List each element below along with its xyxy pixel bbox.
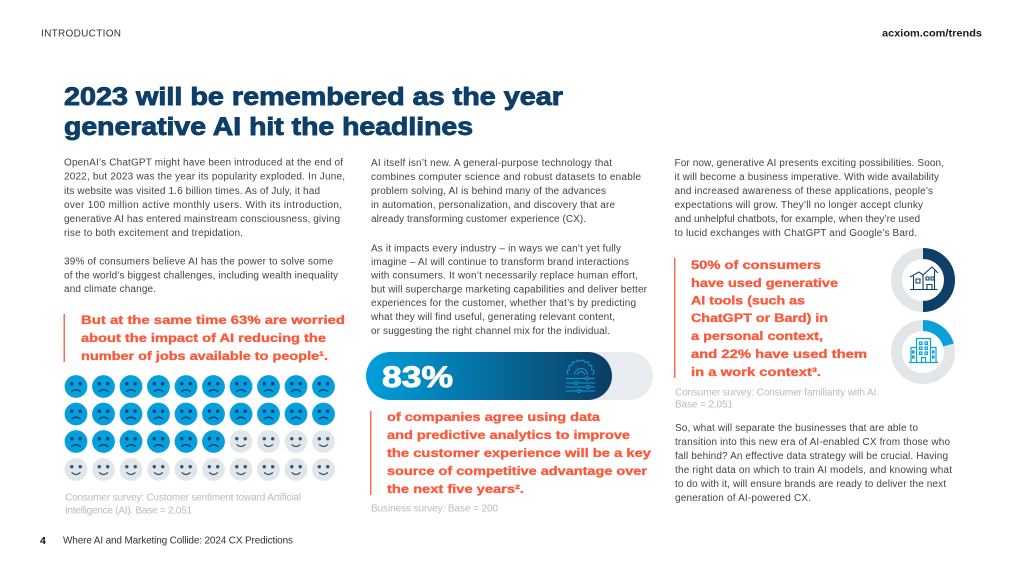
callout: 63% worried about jobs: number of jobs available to people¹. — [81, 349, 328, 363]
stat value: 83% — [382, 361, 453, 394]
text block: column one intro: rise to both excitement and trepidation. — [64, 228, 243, 239]
text block: column one intro: generative AI has entered mainstream consciousness, giving — [64, 214, 340, 225]
callout: 50% and 22% of consumers: 50% of consumers — [691, 258, 821, 272]
callout: 63% worried about jobs: about the impact of AI reducing the — [81, 331, 326, 345]
source note: business survey: Business survey: Base = 200 — [371, 504, 498, 514]
callout: 50% and 22% of consumers: and 22% have used them — [691, 347, 867, 361]
footer title: Where AI and Marketing Collide: 2024 CX Predictions — [63, 536, 293, 546]
page number: 4 — [40, 535, 46, 547]
icon: house — [910, 267, 938, 290]
text block: column three closing: generation of AI-powered CX. — [675, 493, 811, 504]
text block: column three closing: to do with it, will ensure brands are ready to deliver the next — [675, 479, 946, 490]
callout: 50% and 22% of consumers — [674, 258, 867, 379]
callout: 83% of companies: source of competitive advantage over — [387, 464, 647, 478]
text block: column three closing: transition into this new era of AI-enabled CX from those who — [675, 437, 950, 448]
text block: column one intro: over 100 million active monthly users. With its introduction, — [64, 200, 342, 211]
text block: column two: imagine – AI will continue to transform brand interactions — [371, 257, 629, 268]
text block: column two: combines computer science and robust datasets to enable — [371, 172, 641, 183]
text block: column one intro: its website was visited 1.6 billion times. As of July, it had — [64, 186, 320, 197]
text block: column one intro: and climate change. — [64, 284, 156, 295]
stat bar: 83% — [366, 352, 653, 400]
website link: acxiom.com/trends — [882, 28, 982, 40]
callout: 50% and 22% of consumers: ChatGPT or Bard) in — [691, 311, 828, 325]
text block: column one intro — [64, 158, 345, 295]
text block: column two: in automation, personalization, and discovery that are — [371, 200, 615, 211]
source note: consumer familiarity survey: Base = 2,051 — [675, 400, 733, 410]
title: 2023 will be remembered as the year — [64, 83, 563, 111]
icon grid: sentiment faces — [65, 375, 335, 481]
text block: column one intro: of the world’s biggest challenges, including wealth inequality — [64, 270, 338, 282]
text block: column one intro: 2022, but 2023 was the year its popularity exploded. In June, — [64, 172, 345, 183]
source note: consumer familiarity survey — [675, 388, 879, 410]
text block: column three intro: and increased awareness of these applications, people’s — [674, 186, 933, 197]
donut chart: 22% work context — [896, 326, 950, 378]
source note: customer sentiment survey: Intelligence (AI). Base = 2,051 — [65, 506, 192, 516]
callout: 50% and 22% of consumers: AI tools (such as — [691, 294, 805, 308]
text block: column two: with consumers. It won’t necessarily replace human effort, — [370, 270, 638, 282]
callout: 83% of companies: the next five years². — [387, 482, 524, 496]
callout: 50% and 22% of consumers: in a work context³. — [691, 365, 821, 379]
callout: 83% of companies — [370, 410, 651, 496]
text block: column three closing: the right data on which to train AI models, and knowing what — [675, 465, 952, 476]
text block: column one intro: OpenAI’s ChatGPT might have been introduced at the end of — [64, 158, 343, 168]
callout: 50% and 22% of consumers: a personal context, — [691, 329, 823, 343]
text block: column two: or suggesting the right channel mix for the individual. — [371, 326, 610, 337]
source note: customer sentiment survey — [65, 492, 301, 516]
text block: column two: As it impacts every industry – in ways we can’t yet fully — [371, 244, 621, 254]
icon: office building — [909, 338, 938, 362]
text block: column two: already transforming customer experience (CX). — [371, 214, 586, 225]
text block: column three intro: to lucid exchanges with ChatGPT and Google’s Bard. — [674, 228, 917, 239]
section label: introduction: INTRODUCTION — [41, 28, 121, 40]
source note: consumer familiarity survey: Consumer survey: Consumer familiarity with AI. — [675, 388, 879, 398]
text block: column three closing: fall behind? An effective data strategy will be crucial. Having — [675, 451, 948, 462]
source note: customer sentiment survey: Consumer survey: Customer sentiment toward Artificial — [65, 492, 301, 504]
text block: column two: AI itself isn’t new. A general-purpose technology that — [371, 158, 612, 169]
text block: column three intro: and unhelpful chatbots, for example, when they’re used — [674, 214, 920, 225]
text block: column two: but will supercharge marketing capabilities and deliver better — [371, 284, 648, 296]
callout: 63% worried about jobs — [64, 313, 345, 363]
text block: column two: what they will find useful, generating relevant content, — [370, 312, 615, 323]
text block: column three intro: it will become a business imperative. With wide availability — [674, 172, 939, 183]
icon: gear with sliders — [566, 360, 595, 392]
callout: 83% of companies: the customer experience will be a key — [387, 446, 651, 460]
text block: column three intro: For now, generative AI presents exciting possibilities. Soon, — [674, 158, 944, 169]
text block: column three closing: So, what will separate the businesses that are able to — [675, 423, 918, 434]
title — [64, 83, 563, 141]
text block: column one intro: 39% of consumers believe AI has the power to solve some — [64, 256, 333, 268]
text block: column three intro — [674, 158, 944, 239]
text block: column two — [370, 158, 648, 337]
donut chart: 50% personal context — [896, 254, 950, 306]
text block: column two: experiences for the customer, whether that’s by predicting — [371, 298, 636, 309]
callout: 83% of companies: of companies agree using data — [387, 410, 600, 424]
callout: 83% of companies: and predictive analytics to improve — [387, 428, 630, 442]
text block: column three closing — [675, 423, 952, 504]
callout: 63% worried about jobs: But at the same time 63% are worried — [81, 313, 345, 327]
title: generative AI hit the headlines — [64, 113, 473, 141]
text block: column two: problem solving, AI is behind many of the advances — [371, 186, 606, 197]
text block: column three intro: expectations will grow. They’ll no longer accept clunky — [674, 200, 923, 211]
callout: 50% and 22% of consumers: have used generative — [691, 276, 838, 290]
